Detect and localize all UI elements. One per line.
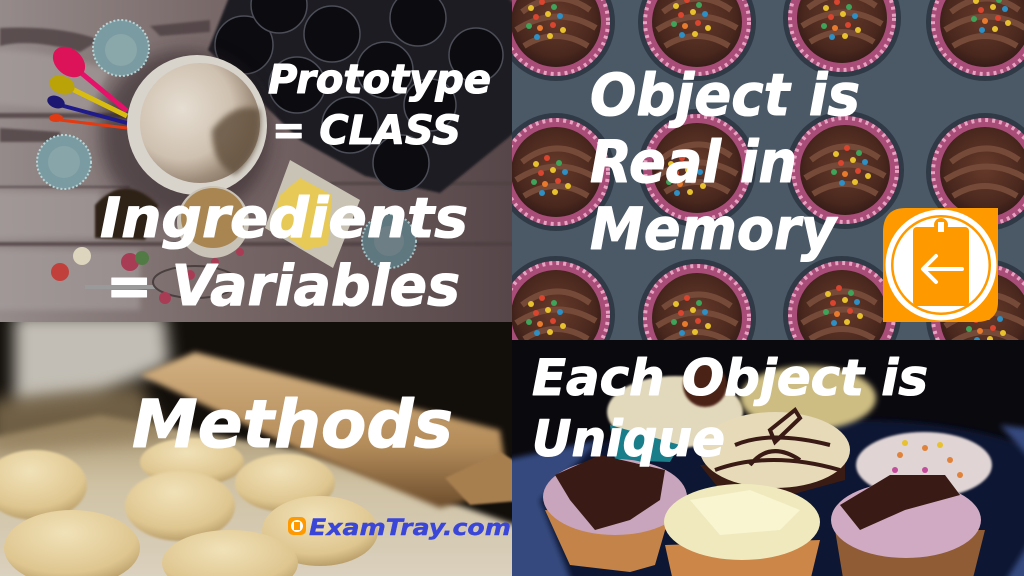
floured surface [0, 415, 530, 576]
chocolate chips [95, 188, 158, 240]
right pink chocolate cupcake [831, 475, 985, 576]
wooden table [0, 0, 512, 322]
heading: prototype = class: = CLASS [272, 108, 461, 154]
back cream cupcakes [607, 363, 992, 498]
panel: dough and rolling pin photo [0, 315, 530, 576]
heading: ingredients = variables: Ingredients [100, 186, 468, 250]
heading: object is real in memory [590, 61, 860, 263]
tray background [512, 0, 1024, 340]
front white chocolate cupcake [664, 484, 820, 576]
panel: baking ingredients photo [0, 0, 530, 322]
cupcake liners [37, 20, 416, 268]
dark backdrop [0, 322, 512, 524]
heading: ingredients = variables [100, 194, 466, 306]
heading: each object is unique [532, 349, 928, 468]
heading: object is real in memory: Memory [590, 195, 838, 263]
blue plate [490, 419, 1024, 576]
heading: each object is unique: Unique [532, 410, 725, 468]
heading: methods: Methods [132, 386, 453, 463]
cupcake rows [497, 0, 1024, 377]
measuring spoons [45, 40, 127, 128]
flour bowl [127, 55, 267, 195]
icon: clipboard logo [883, 208, 998, 322]
rolling pin [140, 352, 530, 508]
heading: prototype = class: Prototype [268, 57, 491, 103]
heading: object is real in memory: Real in [590, 128, 797, 196]
heading: prototype = class [268, 64, 490, 145]
heading: object is real in memory: Object is [590, 61, 860, 129]
panel: cupcakes in tray photo [512, 0, 1024, 340]
left pink chocolate cupcake [543, 455, 687, 572]
shadows [100, 50, 270, 220]
watermark: examtray.com: ExamTray.com [309, 516, 511, 541]
dark background [512, 340, 1024, 458]
panel: decorated cupcakes photo [490, 340, 1024, 576]
heading: ingredients = variables: = Variables [106, 254, 460, 319]
muffin tray [208, 0, 530, 193]
brown sugar bowl [177, 186, 249, 258]
butter plate [265, 160, 360, 268]
dough balls [0, 438, 378, 576]
heading: each object is unique: Each Object is [532, 349, 928, 407]
centre chocolate swirl cupcake [700, 410, 850, 495]
whisk and sprinkles [51, 247, 244, 304]
